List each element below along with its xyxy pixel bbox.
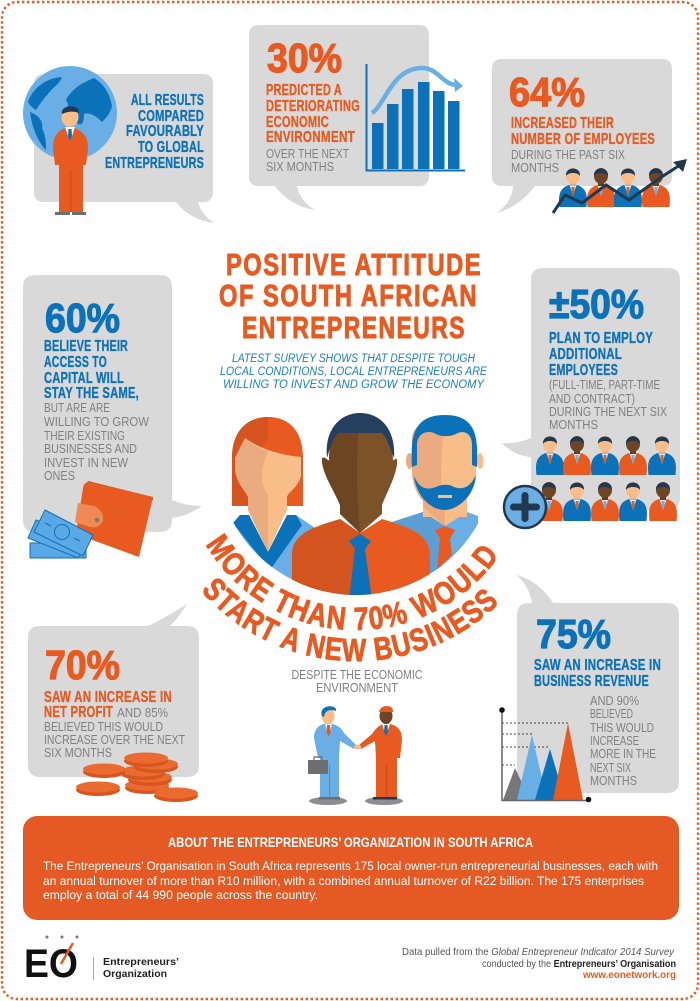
subtitle: WILLING TO INVEST AND GROW THE ECONOMY (223, 379, 485, 391)
icon: growth arrow (553, 159, 687, 213)
curved headline: MORE THAN 70% WOULD (206, 532, 496, 630)
text: increased employees: MONTHS (511, 161, 559, 175)
text: net profit: AND 85% (117, 706, 168, 720)
triangle chart (499, 707, 591, 802)
body text: employ a total of 44 990 people across the country. (43, 890, 318, 902)
text: business revenue: BUSINESS REVENUE (534, 673, 649, 690)
text: despite the economic environment: ENVIRONMENT (316, 681, 398, 695)
text: despite the economic environment (292, 668, 422, 695)
text: plan to employ: DURING THE NEXT SIX (549, 405, 668, 419)
curved headline: START A NEW BUSINESS (203, 578, 497, 662)
text: business revenue: INCREASE (590, 734, 639, 748)
speech bubble (34, 74, 214, 223)
text: access to capital (44, 338, 149, 483)
text: plan to employ: ADDITIONAL (549, 346, 622, 363)
panel: plus 50 percent (502, 268, 680, 528)
text: predicted a deteriorating: DETERIORATING (266, 98, 360, 115)
text: plan to employ: PLAN TO EMPLOY (549, 330, 653, 347)
text: predicted a deteriorating: SIX MONTHS (266, 160, 334, 174)
logo: Entrepreneurs' Organization: Organization (103, 968, 167, 980)
text: net profit: INCREASE OVER THE NEXT (44, 733, 185, 747)
icon: coins (76, 752, 198, 802)
text: predicted a deteriorating: ENVIRONMENT (266, 129, 355, 146)
text: plan to employ: AND CONTRACT) (549, 392, 635, 406)
stat: 30%: 30% (267, 35, 342, 81)
text: plan to employ: MONTHS (549, 418, 598, 432)
text: all results: ALL RESULTS (131, 92, 204, 109)
text: business revenue: THIS WOULD (590, 721, 654, 735)
text: access to capital: ACCESS TO (44, 354, 107, 371)
stat: 75%: 75% (536, 611, 611, 657)
text: all results: FAVOURABLY (126, 123, 204, 140)
text: access to capital: BUT ARE ARE (44, 401, 110, 415)
text: plan to employ: (FULL-TIME, PART-TIME (549, 378, 660, 392)
panel: all results compared (23, 66, 214, 223)
text: net profit (44, 689, 185, 760)
speech bubble (249, 25, 429, 210)
icon: plus (504, 486, 546, 528)
panel: 64 percent (492, 59, 687, 213)
speech bubble (517, 575, 679, 793)
text: net profit: BELIEVED THIS WOULD (44, 720, 163, 734)
subtitle: LOCAL CONDITIONS, LOCAL ENTREPRENEURS ARE (220, 366, 487, 378)
title: POSITIVE ATTITUDE (226, 247, 482, 282)
logo: Entrepreneurs' Organization: EO (24, 942, 78, 986)
icon: handshake (308, 706, 403, 805)
footer source note (402, 947, 676, 981)
footer source note: www.eonetwork.org (582, 970, 676, 981)
text: all results (105, 92, 204, 172)
text: business revenue (534, 657, 661, 788)
text: business revenue: AND 90% (590, 694, 639, 708)
icon: businessman in orange suit (53, 106, 88, 215)
title (219, 247, 482, 345)
speech bubble (23, 275, 202, 532)
text: increased employees: DURING THE PAST SIX (511, 148, 626, 162)
text: net profit: SIX MONTHS (44, 746, 112, 760)
logo: Entrepreneurs' Organization (24, 936, 179, 986)
panel: 75 percent (499, 575, 679, 802)
text: access to capital: INVEST IN NEW (44, 456, 128, 470)
panel: 70 percent (28, 604, 199, 802)
panel: about the entrepreneurs' organization (23, 816, 679, 920)
speech bubble (28, 604, 199, 777)
text: access to capital: CAPITAL WILL (44, 370, 124, 387)
stat: 60%: 60% (45, 295, 120, 341)
subtitle: LATEST SURVEY SHOWS THAT DESPITE TOUGH (232, 353, 476, 365)
text: access to capital: BELIEVE THEIR (44, 338, 128, 355)
text: business revenue: MORE IN THE (590, 747, 656, 761)
text: all results: TO GLOBAL (138, 139, 204, 156)
bar chart with trend arrow (366, 64, 465, 170)
text: increased employees (511, 115, 655, 175)
text: despite the economic environment: DESPITE THE ECONOMIC (292, 668, 422, 682)
text: all results: COMPARED (138, 108, 204, 125)
footer source note: Data pulled from the Global Entrepreneur Indicator 2014 Survey (402, 947, 675, 958)
illustration: three entrepreneurs (232, 413, 484, 600)
figure: woman (232, 417, 314, 585)
text: all results: ENTREPRENEURS (105, 155, 204, 172)
speech bubble (492, 59, 672, 213)
panel: 60 percent (23, 275, 202, 558)
stat: 64%: 64% (509, 69, 585, 115)
text: business revenue: MONTHS (590, 774, 637, 788)
icon: wallet (75, 481, 153, 557)
panel: 30 percent (249, 25, 465, 210)
body text (43, 861, 658, 902)
text: predicted a deteriorating: PREDICTED A (266, 82, 342, 99)
speech bubble (502, 268, 680, 510)
icon: banknotes (28, 510, 93, 558)
text: plan to employ: EMPLOYEES (549, 362, 618, 379)
text: predicted a deteriorating (266, 82, 360, 174)
icon: ten employees (535, 436, 677, 521)
figure: bearded man (392, 415, 484, 600)
text: access to capital: BUSINESSES AND (44, 442, 137, 456)
subtitle (220, 353, 487, 391)
text: predicted a deteriorating: ECONOMIC (266, 114, 329, 131)
stat: ±50%: ±50% (549, 281, 644, 327)
text: business revenue: BELIEVED (590, 707, 633, 721)
title: OF SOUTH AFRICAN (219, 278, 478, 313)
icon: four employees (559, 168, 670, 207)
figure: centre man (292, 413, 430, 600)
body text: The Entrepreneurs’ Organisation in South Africa represents 175 local owner-run entrepreneurial businesses, each with (43, 861, 658, 873)
icon: globe (23, 66, 117, 160)
stat: 70%: 70% (45, 642, 120, 688)
text: net profit: NET PROFIT (44, 704, 113, 721)
footer source note: conducted by the Entrepreneurs’ Organisation (482, 959, 676, 970)
logo: Entrepreneurs' Organization: Entrepreneurs’ (103, 956, 179, 968)
text: access to capital: ONES (44, 469, 75, 483)
text: net profit: SAW AN INCREASE IN (44, 689, 172, 706)
text: access to capital: WILLING TO GROW (44, 415, 149, 429)
heading: about: ABOUT THE ENTREPRENEURS’ ORGANIZATION IN SOUTH AFRICA (168, 835, 533, 850)
text: increased employees: INCREASED THEIR (511, 115, 614, 132)
text: access to capital: STAY THE SAME, (44, 385, 139, 402)
body text: an annual turnover of more than R10 million, with a combined annual turnover of R22 billion. The 175 enterprises (43, 876, 644, 888)
text: predicted a deteriorating: OVER THE NEXT (266, 147, 349, 161)
title: ENTREPRENEURS (242, 310, 466, 345)
text: access to capital: THEIR EXISTING (44, 429, 125, 443)
text: plan to employ (549, 330, 668, 432)
text: business revenue: NEXT SIX (590, 761, 631, 775)
